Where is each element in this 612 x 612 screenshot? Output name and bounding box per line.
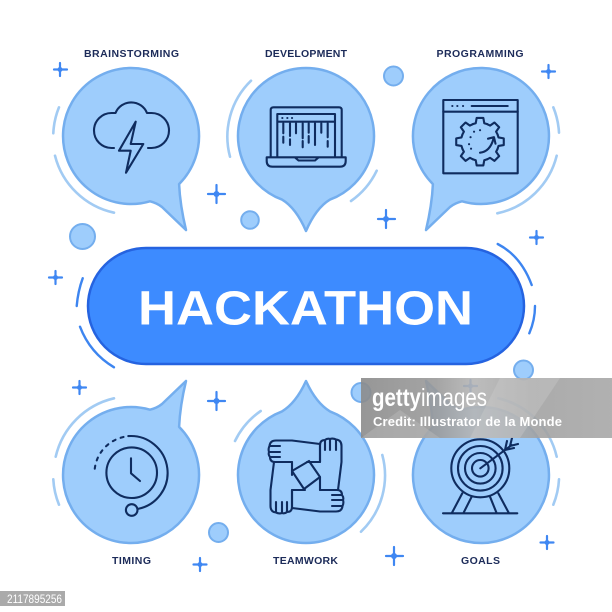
label: goals: GOALS <box>461 555 500 567</box>
title: HACKATHON <box>138 282 473 336</box>
label: programming: PROGRAMMING <box>436 48 524 60</box>
image id tag: 2117895256 <box>7 594 62 606</box>
panel: timing bubble <box>53 381 199 543</box>
icon: laptop with code <box>267 107 346 167</box>
panel: development bubble <box>227 68 377 231</box>
icon: four joined hands <box>269 439 343 513</box>
label: timing: TIMING <box>112 555 151 567</box>
label: development: DEVELOPMENT <box>265 48 348 60</box>
icon: target with arrow <box>443 438 518 513</box>
panel: goals bubble <box>413 381 559 543</box>
icon: clock with progress arc <box>94 436 168 516</box>
label: brainstorming: BRAINSTORMING <box>84 48 179 60</box>
label: teamwork: TEAMWORK <box>273 555 338 567</box>
decorative sparkles <box>49 63 555 571</box>
panel: brainstorming bubble <box>53 68 199 230</box>
decorative circles <box>70 66 533 542</box>
image id tag <box>0 591 65 606</box>
watermark credit: Credit: Illustrator de la Monde <box>373 414 562 429</box>
panel: teamwork bubble <box>235 381 385 543</box>
panel: programming bubble <box>413 68 559 230</box>
watermark banner <box>361 378 612 438</box>
watermark logo: gettyimages <box>372 384 487 412</box>
panel: central hackathon pill <box>77 244 535 367</box>
icon: cloud with lightning <box>94 102 169 173</box>
icon: browser window with gear <box>443 100 518 173</box>
